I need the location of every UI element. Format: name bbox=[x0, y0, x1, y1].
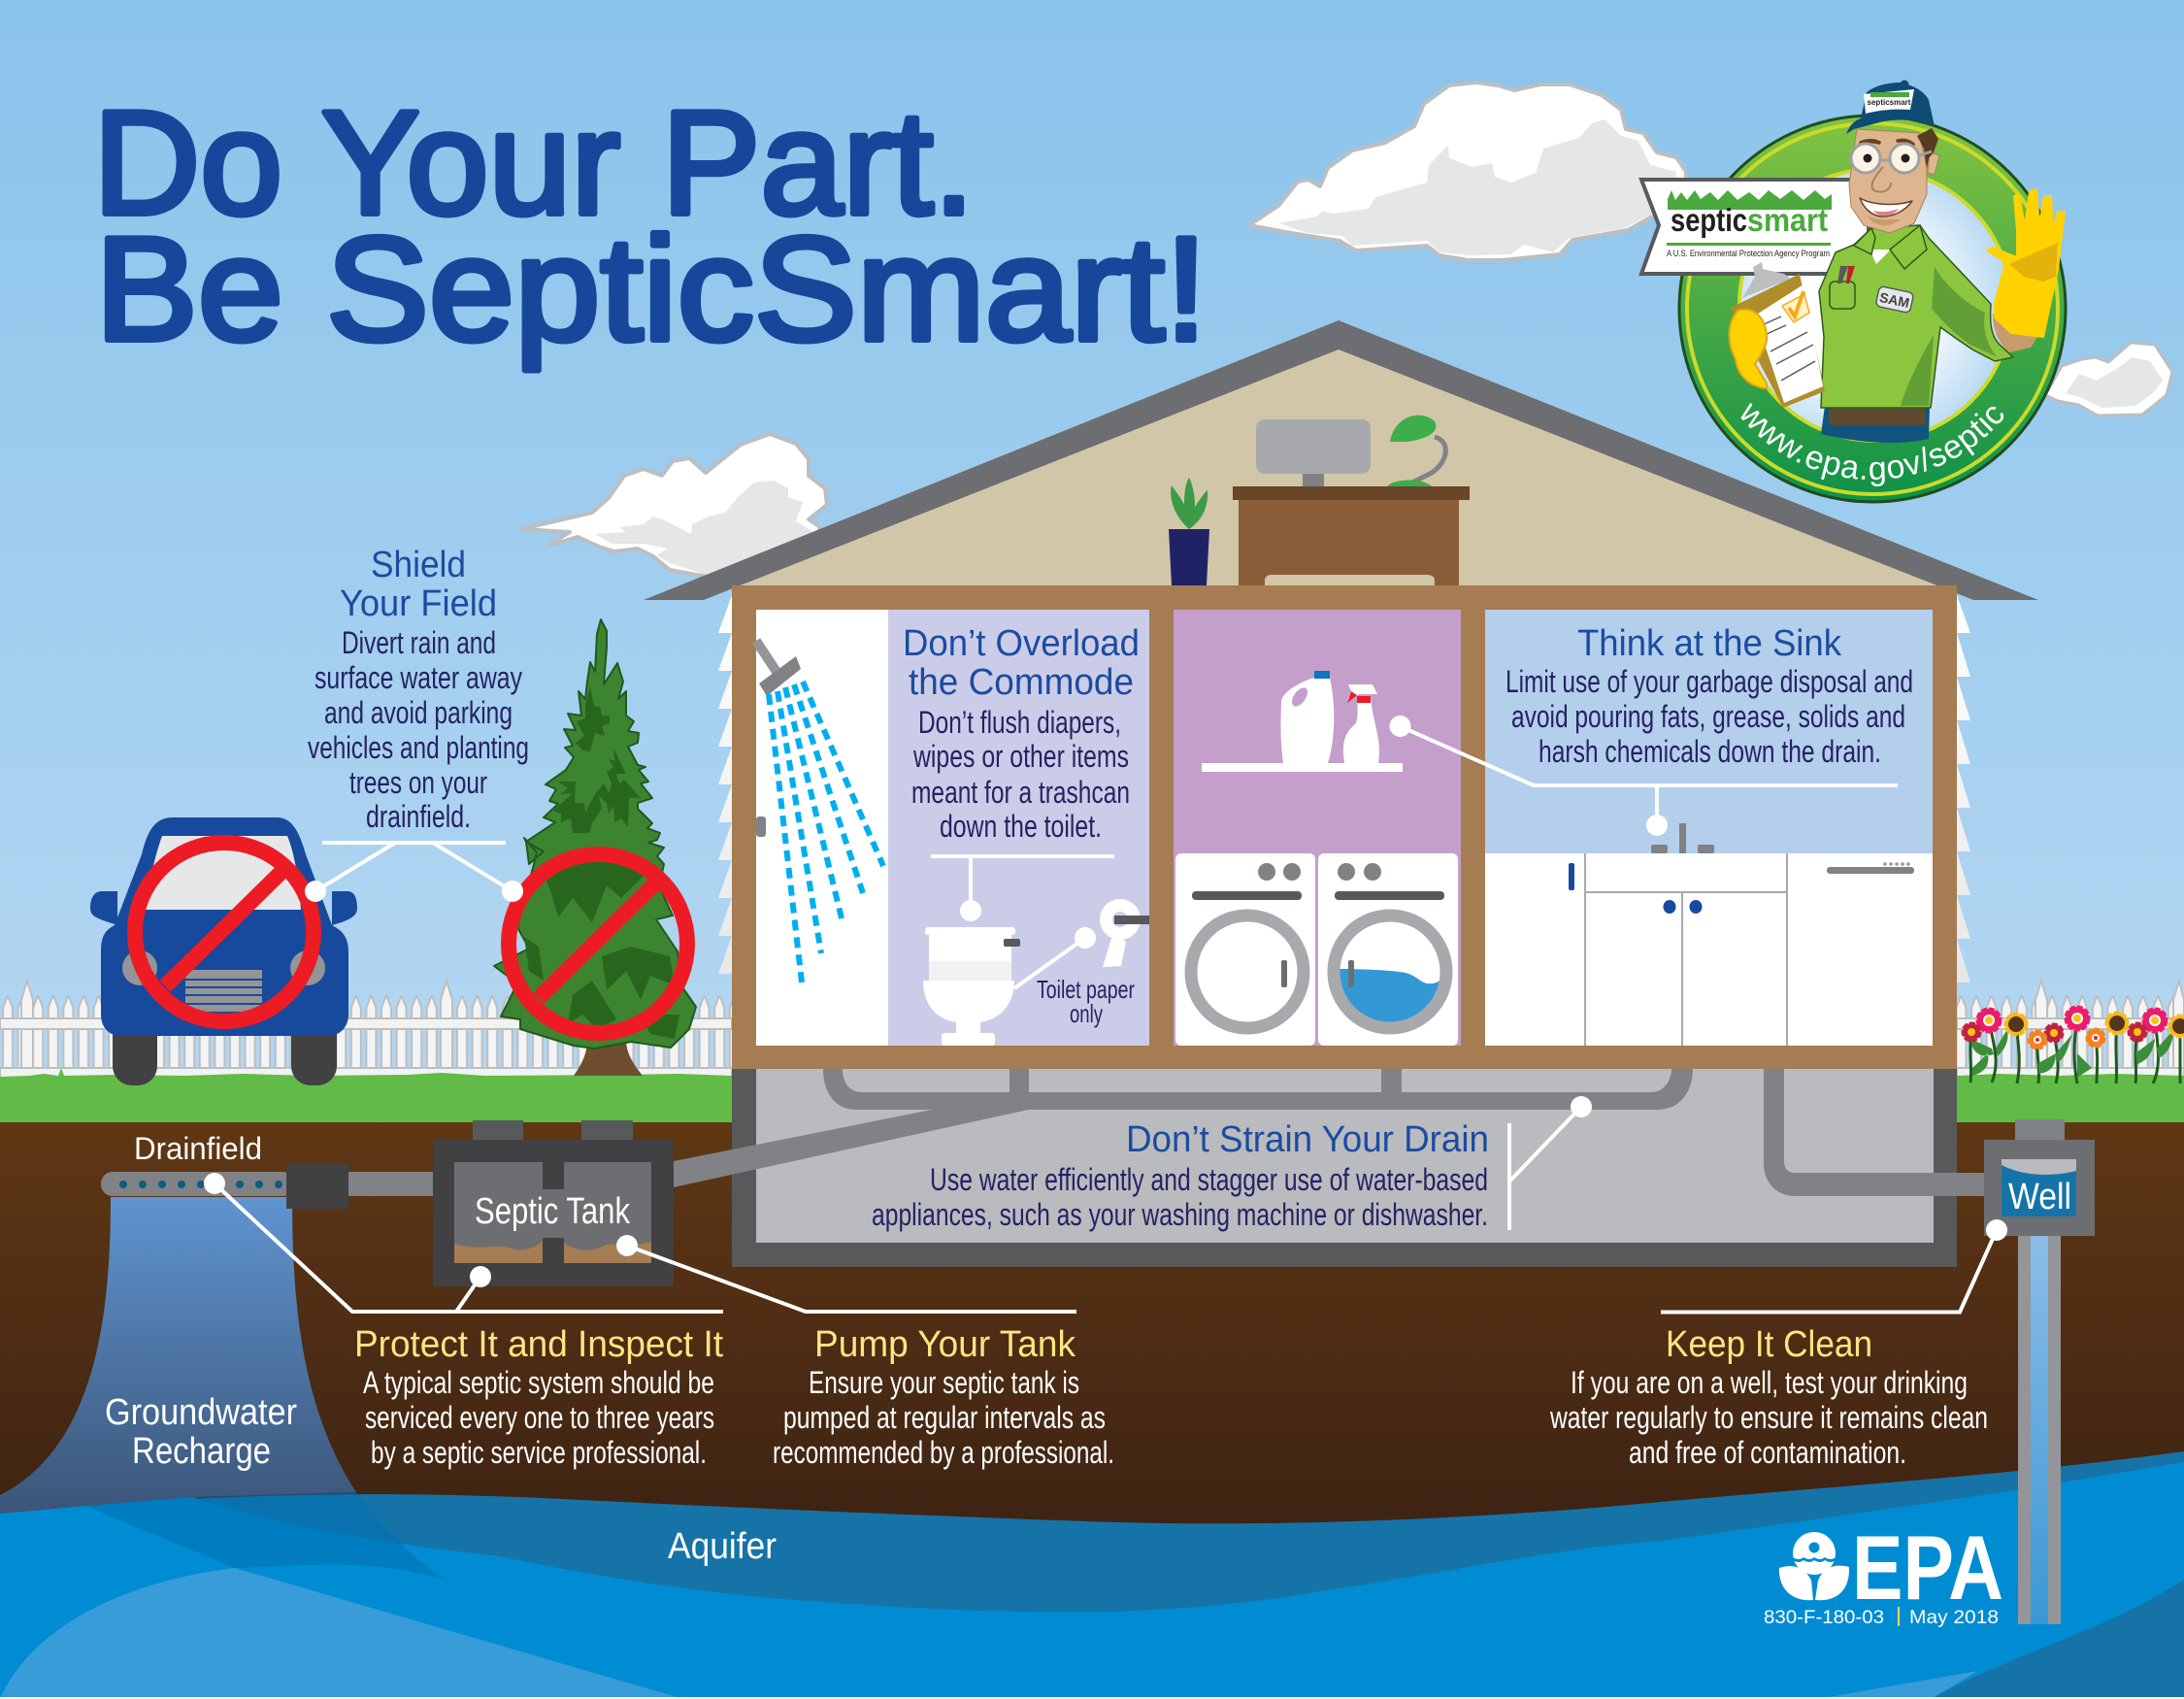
cloud: middle left bbox=[521, 434, 827, 576]
callout line bbox=[1509, 1107, 1581, 1230]
groundwater recharge plume bbox=[0, 1197, 446, 1580]
EPA logo bbox=[1764, 1516, 2003, 1628]
callout line: toilet paper bbox=[1014, 938, 1085, 988]
text block: protect it and inspect it: by a septic service professional. bbox=[371, 1435, 707, 1470]
pine tree with prohibition sign bbox=[494, 619, 696, 1076]
title: Do Your Part. bbox=[93, 81, 975, 246]
text block: keep it clean: Keep It Clean bbox=[1666, 1324, 1872, 1365]
text block: keep it clean bbox=[1549, 1324, 1988, 1470]
no symbol bbox=[135, 843, 314, 1021]
cap logo grass bbox=[1870, 92, 1909, 97]
text block: pump your tank: Pump Your Tank bbox=[814, 1324, 1076, 1365]
text block: shield your field: trees on your bbox=[349, 765, 487, 800]
well bbox=[1984, 1119, 2095, 1624]
washing machine: right bbox=[1318, 853, 1458, 1046]
nose bbox=[1872, 167, 1891, 192]
body text: Limit use of your garbage disposal and bbox=[1506, 664, 1913, 699]
attic: potted plant bbox=[1169, 478, 1209, 585]
body text: Don’t flush diapers, bbox=[918, 705, 1121, 740]
aquifer: water layers bbox=[0, 1451, 2184, 1699]
label: drainfield: Drainfield bbox=[134, 1131, 262, 1166]
text block: shield your field bbox=[308, 545, 529, 834]
white undershirt bbox=[1870, 250, 1891, 264]
EPA wordmark: EPA bbox=[1852, 1516, 2003, 1618]
panel: think at the sink bbox=[1485, 610, 1933, 1046]
callout dot bbox=[1571, 1096, 1592, 1117]
text block: shield your field: drainfield. bbox=[366, 799, 471, 834]
septicsmart banner bbox=[1641, 180, 1869, 274]
title: Be SepticSmart! bbox=[95, 207, 1208, 372]
callouts: protect it and inspect it bbox=[204, 1173, 723, 1312]
eyebrows bbox=[1859, 139, 1915, 147]
body text: meant for a trashcan bbox=[911, 775, 1130, 810]
callout: keep it clean bbox=[1661, 1219, 2007, 1313]
label: toilet paper only: only bbox=[1070, 999, 1103, 1028]
no symbol bbox=[509, 854, 687, 1033]
text block: protect it and inspect it bbox=[354, 1324, 723, 1470]
text block: pump your tank: recommended by a professional. bbox=[773, 1435, 1114, 1470]
text block: shield your field: and avoid parking bbox=[324, 695, 513, 730]
callout dot: toilet bbox=[960, 900, 981, 921]
yellow glove waving bbox=[1987, 189, 2065, 337]
car with prohibition sign bbox=[90, 817, 357, 1085]
label: toilet paper only: Toilet paper bbox=[1037, 975, 1135, 1004]
text block: pump your tank bbox=[773, 1324, 1114, 1470]
shirt shading bbox=[1901, 267, 1998, 406]
body text: Use water efficiently and stagger use of water-based bbox=[930, 1162, 1488, 1197]
icon: shelf with bottles bbox=[1202, 671, 1403, 772]
callout: laundry to sink bbox=[1390, 716, 1898, 836]
hair bbox=[1917, 128, 1938, 168]
forearm bbox=[1993, 314, 2037, 352]
website url: www.epa.gov/septic bbox=[1741, 402, 2003, 486]
mouth bbox=[1860, 198, 1912, 217]
text block: shield your field: surface water away bbox=[314, 660, 522, 695]
label: toilet paper only bbox=[1037, 975, 1135, 1028]
mascot: Sam bbox=[1730, 80, 2065, 443]
washing machine: left bbox=[1175, 853, 1315, 1046]
ear bbox=[1928, 152, 1939, 175]
text block: protect it and inspect it: A typical septic system should be bbox=[363, 1365, 714, 1400]
text block: keep it clean: water regularly to ensure it remains clean bbox=[1549, 1400, 1988, 1435]
cap bbox=[1846, 83, 1935, 134]
yellow glove holding clipboard bbox=[1730, 310, 1767, 388]
section: don't strain your drain bbox=[872, 1096, 1592, 1232]
callouts: shield your field bbox=[305, 843, 523, 902]
cap patch bbox=[1864, 89, 1914, 114]
body text bbox=[872, 1162, 1488, 1232]
publication number: 830-F-180-03 bbox=[1764, 1608, 1884, 1628]
basement bbox=[732, 1069, 1957, 1267]
ground: soil bbox=[0, 1122, 2184, 1530]
cloud: top centre bbox=[1249, 83, 1686, 260]
body text: appliances, such as your washing machine or dishwasher. bbox=[872, 1197, 1488, 1232]
heading: Think at the Sink bbox=[1577, 623, 1842, 664]
icon: toilet paper bbox=[1100, 899, 1149, 967]
text block: shield your field: Your Field bbox=[340, 583, 497, 624]
groundwater label: Groundwater bbox=[105, 1392, 297, 1433]
ground: grass bbox=[0, 1068, 2184, 1122]
text block: keep it clean: If you are on a well, test your drinking bbox=[1571, 1365, 1968, 1400]
body text: wipes or other items bbox=[912, 739, 1129, 774]
face bbox=[1849, 129, 1927, 233]
callout dot: toilet paper bbox=[1075, 927, 1096, 949]
chin shading bbox=[1867, 216, 1901, 225]
shirt pocket and pens bbox=[1830, 266, 1855, 309]
pipes: house plumbing bbox=[674, 1069, 1990, 1196]
house frame bbox=[732, 585, 1957, 1069]
name tag: SAM bbox=[1878, 289, 1911, 311]
text block: shield your field: Divert rain and bbox=[342, 625, 496, 660]
text block: pump your tank: pumped at regular intervals as bbox=[783, 1400, 1106, 1435]
roof bbox=[644, 320, 2038, 600]
glasses and eyes bbox=[1851, 144, 1932, 173]
body text: harsh chemicals down the drain. bbox=[1539, 734, 1881, 769]
panel: don't overload the commode bbox=[888, 610, 1149, 1046]
body text bbox=[911, 705, 1130, 844]
house siding bbox=[718, 595, 1970, 983]
heading: Don’t Strain Your Drain bbox=[1126, 1119, 1489, 1160]
kitchen cabinets bbox=[1485, 853, 1933, 1046]
cap button bbox=[1901, 80, 1908, 89]
sky background bbox=[0, 0, 2184, 1078]
mascot badge ring bbox=[1677, 115, 2068, 503]
callout line: toilet bbox=[931, 856, 1114, 903]
publication date: May 2018 bbox=[1909, 1608, 1999, 1628]
drainfield pipe bbox=[101, 1163, 436, 1209]
logo word smart: smart bbox=[1747, 202, 1828, 238]
fence: left bbox=[0, 981, 732, 1078]
logo word septic: septic bbox=[1671, 202, 1747, 238]
label: septic tank: Septic Tank bbox=[475, 1191, 631, 1232]
green rule bbox=[1667, 243, 1831, 246]
attic: desk with computer and lamp bbox=[1233, 416, 1470, 587]
icon: toilet bbox=[923, 927, 1020, 1046]
callout: pump your tank bbox=[616, 1235, 1076, 1312]
flower garden bbox=[1963, 1007, 2184, 1083]
body text: avoid pouring fats, grease, solids and bbox=[1511, 699, 1905, 734]
icon: faucet bbox=[1651, 823, 1714, 853]
separator bbox=[1898, 1607, 1900, 1626]
label: well: Well bbox=[2008, 1177, 2071, 1217]
heading line 2: the Commode bbox=[909, 662, 1134, 703]
panel: laundry room bbox=[1174, 610, 1461, 1046]
text block: protect it and inspect it: serviced every one to three years bbox=[365, 1400, 714, 1435]
text block: shield your field: Shield bbox=[371, 545, 466, 585]
text block: shield your field: vehicles and planting bbox=[308, 730, 529, 765]
cap logo text: septicsmart bbox=[1868, 98, 1911, 107]
grass strip bbox=[1668, 190, 1832, 210]
body text: down the toilet. bbox=[940, 809, 1102, 844]
heading: Don’t Overload bbox=[903, 623, 1140, 664]
name tag bbox=[1875, 285, 1914, 314]
recharge label: Recharge bbox=[132, 1431, 271, 1472]
tagline: A U.S. Environmental Protection Agency Program bbox=[1667, 249, 1830, 258]
fence: right bbox=[1957, 981, 2184, 1078]
icon: EPA seal bbox=[1779, 1532, 1849, 1600]
panel: bathroom shower bbox=[756, 610, 888, 1046]
aquifer label: Aquifer bbox=[668, 1526, 777, 1567]
septic tank bbox=[433, 1120, 674, 1286]
clipboard bbox=[1731, 262, 1825, 408]
cloud: right bbox=[2045, 343, 2172, 416]
jeans and belt bbox=[1821, 406, 1930, 443]
title bbox=[93, 81, 1208, 372]
text block: pump your tank: Ensure your septic tank is bbox=[809, 1365, 1079, 1400]
body text bbox=[1506, 664, 1913, 769]
text block: protect it and inspect it: Protect It and Inspect It bbox=[354, 1324, 723, 1365]
collar bbox=[1854, 225, 1927, 269]
shirt bbox=[1819, 225, 2013, 408]
text block: keep it clean: and free of contamination. bbox=[1629, 1435, 1906, 1470]
